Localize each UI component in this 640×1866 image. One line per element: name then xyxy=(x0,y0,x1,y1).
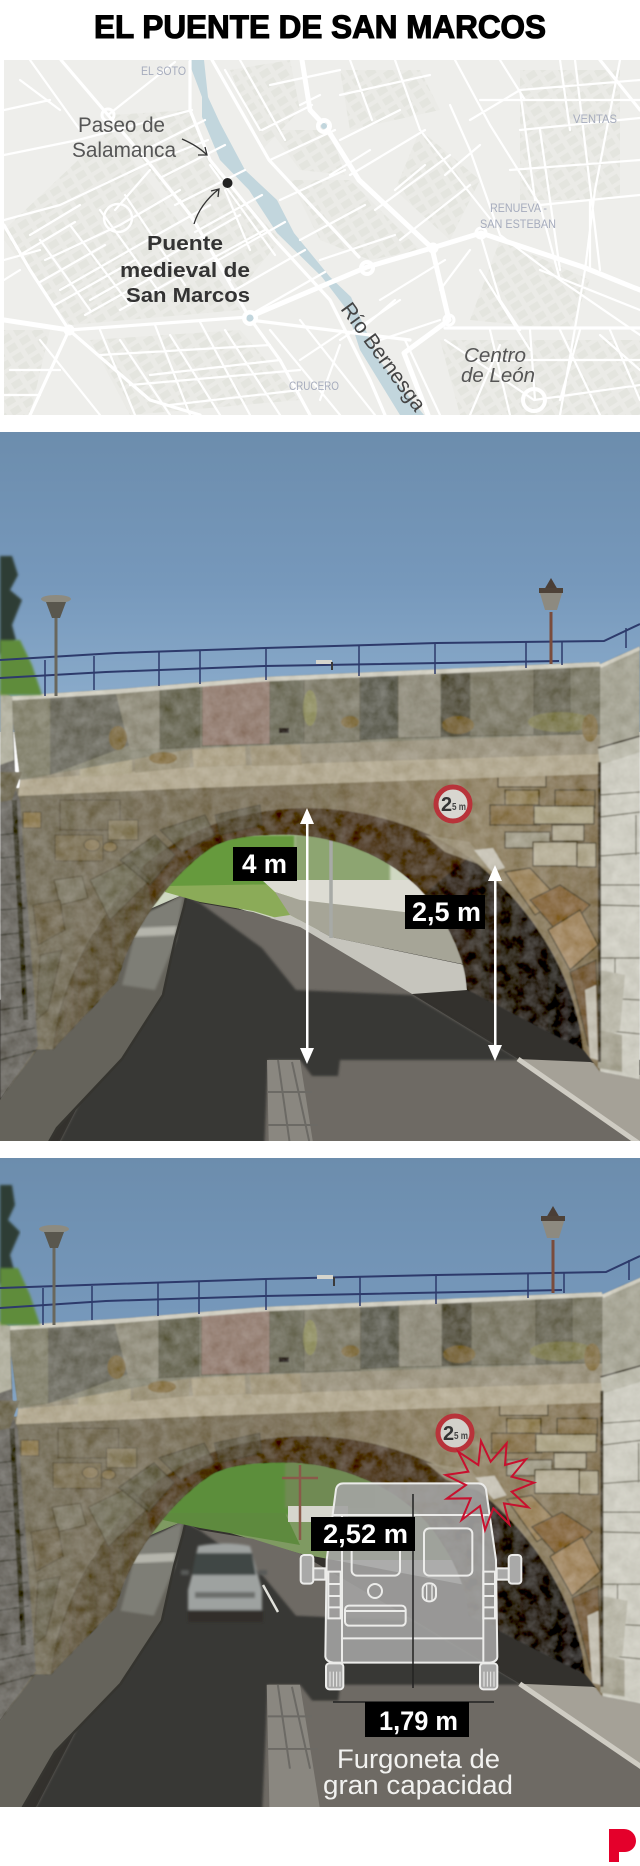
map: neighbourhood labels: SAN ESTEBAN xyxy=(480,217,556,231)
title: EL PUENTE DE SAN MARCOS xyxy=(94,9,546,45)
van wheels xyxy=(326,1663,497,1689)
street lamp, left xyxy=(41,595,71,696)
label: 2,52 m: 2,52 m xyxy=(323,1519,408,1549)
railing xyxy=(0,1256,640,1325)
street lamp, left xyxy=(39,1225,69,1325)
map: streets xyxy=(4,60,640,415)
distant street light xyxy=(316,660,333,670)
sign: height limit: 5 m xyxy=(452,802,466,813)
background behind the arch xyxy=(152,834,410,930)
railing xyxy=(0,624,640,696)
label: 4 m xyxy=(233,847,297,881)
map label: Puente medieval de San Marcos: medieval de xyxy=(120,260,250,282)
map label: city centre: Centro xyxy=(464,345,526,367)
map: neighbourhood labels: RENUEVA - xyxy=(490,201,547,215)
map: river xyxy=(188,60,424,415)
distant street light xyxy=(317,1275,335,1286)
map panel xyxy=(4,60,640,416)
bridge xyxy=(0,646,640,1100)
tree: green xyxy=(0,640,42,695)
map: neighbourhood labels xyxy=(141,64,617,393)
street lamp, right xyxy=(539,578,563,664)
scene behind the arch xyxy=(163,1460,375,1545)
map label: city centre: de León xyxy=(461,365,535,387)
map: neighbourhood labels: CRUCERO xyxy=(289,379,339,393)
van ladders xyxy=(328,1572,495,1618)
sign: height limit: 5 m xyxy=(454,1431,468,1442)
label: 1,79 m: 1,79 m xyxy=(379,1706,458,1736)
marker: bridge location xyxy=(222,178,232,188)
caption: van type: Furgoneta de xyxy=(337,1744,500,1774)
van body xyxy=(325,1483,497,1663)
sign: height limit: 2 xyxy=(443,1423,454,1445)
car xyxy=(181,1544,267,1622)
map label: Puente medieval de San Marcos: San Marcos xyxy=(126,285,250,307)
map label: Paseo de Salamanca xyxy=(73,116,176,157)
logo xyxy=(609,1829,636,1862)
label: 4 m: 4 m xyxy=(242,849,287,879)
bridge xyxy=(0,1276,640,1724)
width line xyxy=(333,1701,494,1703)
background behind the arch xyxy=(150,1462,452,1560)
map: block shading xyxy=(4,60,640,415)
map label: city centre xyxy=(462,348,534,382)
arrow: bridge location xyxy=(194,189,219,224)
map label: Paseo de Salamanca: Paseo de xyxy=(78,114,165,137)
van windows xyxy=(352,1533,400,1576)
sign: height limit xyxy=(438,1416,472,1450)
arrow: Paseo de Salamanca xyxy=(182,139,207,155)
sign: height limit: 2 xyxy=(441,794,452,816)
van body lines xyxy=(333,1515,491,1662)
caption: van type: gran capacidad xyxy=(323,1770,513,1800)
photo: bridge with clearance heights xyxy=(0,432,640,1200)
poles under the arch xyxy=(329,835,333,938)
van mirrors xyxy=(301,1555,521,1584)
map label: Paseo de Salamanca: Salamanca xyxy=(72,139,176,162)
photo: van against the bridge xyxy=(0,1158,640,1823)
map: neighbourhood labels: VENTAS xyxy=(573,112,617,126)
scene behind the arch xyxy=(165,835,467,994)
label: 2,5 m: 2,5 m xyxy=(412,897,481,927)
impact star xyxy=(446,1441,534,1530)
sky xyxy=(0,432,640,732)
tree: pine xyxy=(0,556,22,655)
map label: Puente medieval de San Marcos: Puente xyxy=(147,233,223,255)
map label: Puente medieval de San Marcos xyxy=(122,236,250,302)
arrow: 4 m height xyxy=(300,808,314,1064)
tree: green xyxy=(0,1268,40,1325)
van silhouette xyxy=(301,1483,521,1689)
height line xyxy=(412,1494,414,1688)
lamp post under the arch xyxy=(282,1465,318,1540)
arrow: 2,5 m height xyxy=(488,865,502,1061)
label: 1,79 m xyxy=(365,1702,469,1737)
sign: height limit xyxy=(436,787,470,821)
caption: van type xyxy=(323,1744,513,1800)
map label: river: Río Bernesga xyxy=(336,298,430,416)
street lamp, right xyxy=(541,1206,565,1293)
road marking xyxy=(263,1585,278,1612)
van details xyxy=(368,1584,382,1598)
sky xyxy=(0,1158,640,1418)
map: neighbourhood labels: EL SOTO xyxy=(141,64,186,78)
tree: pine xyxy=(0,1185,20,1285)
